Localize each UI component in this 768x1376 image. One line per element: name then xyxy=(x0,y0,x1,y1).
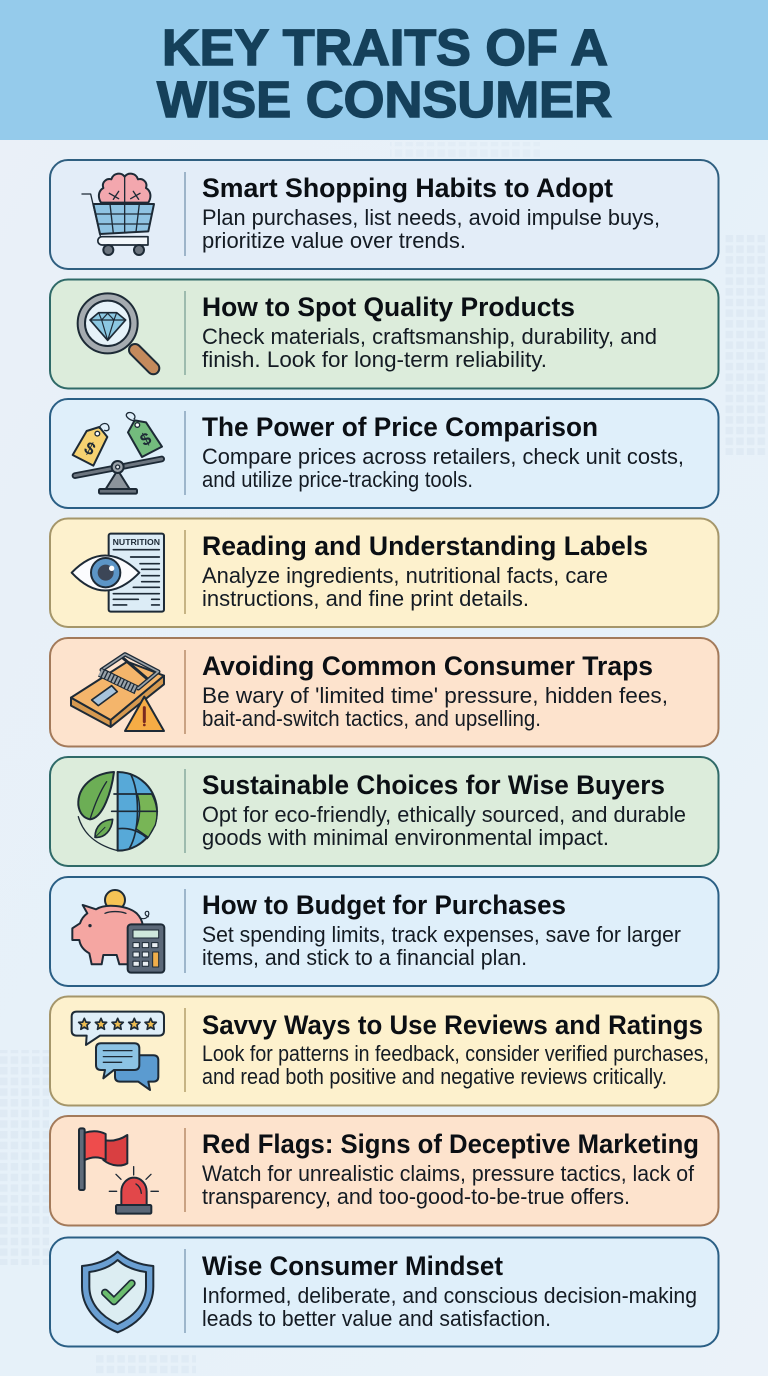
panel: budget for purchases xyxy=(50,877,718,986)
description xyxy=(202,444,684,492)
description xyxy=(202,1161,695,1209)
icon: red flag and siren xyxy=(79,1128,158,1214)
heading: Avoiding Common Consumer Traps xyxy=(202,651,653,681)
description xyxy=(202,324,657,372)
description: Analyze ingredients, nutritional facts, care xyxy=(202,563,608,588)
title: KEY TRAITS OF A xyxy=(162,19,608,76)
icon: star rating and chat bubbles xyxy=(72,1012,164,1090)
icon: price tags on scale xyxy=(73,413,162,494)
description: Informed, deliberate, and conscious decision-making xyxy=(202,1283,697,1308)
description: and read both positive and negative reviews critically. xyxy=(202,1064,667,1089)
description xyxy=(202,683,668,731)
description xyxy=(202,922,681,970)
heading: How to Budget for Purchases xyxy=(202,890,566,920)
panel: smart shopping habits xyxy=(50,160,718,269)
heading: Red Flags: Signs of Deceptive Marketing xyxy=(202,1129,699,1159)
heading: Reading and Understanding Labels xyxy=(202,531,648,561)
description: transparency, and too-good-to-be-true offers. xyxy=(202,1184,630,1209)
icon: price tags on scale: $ xyxy=(137,428,155,450)
icon: piggy bank and calculator xyxy=(72,890,164,973)
icon: globe and leaf xyxy=(78,772,157,851)
title: WISE CONSUMER xyxy=(157,71,612,128)
description: and utilize price-tracking tools. xyxy=(202,467,473,492)
description: Opt for eco-friendly, ethically sourced, and durable xyxy=(202,802,686,827)
description xyxy=(202,563,608,611)
icon: price tags on scale: $ xyxy=(81,437,99,460)
description: Compare prices across retailers, check unit costs, xyxy=(202,444,684,469)
panel: reviews and ratings xyxy=(50,996,718,1106)
description: Set spending limits, track expenses, save for larger xyxy=(202,922,681,947)
description: bait-and-switch tactics, and upselling. xyxy=(202,706,541,731)
panel: sustainable choices xyxy=(50,757,718,866)
panel: spot quality products xyxy=(50,280,718,388)
description: instructions, and fine print details. xyxy=(202,586,529,611)
heading: The Power of Price Comparison xyxy=(202,412,598,442)
description: leads to better value and satisfaction. xyxy=(202,1306,551,1331)
description xyxy=(202,1283,697,1331)
description: Plan purchases, list needs, avoid impulse buys, xyxy=(202,205,660,230)
description xyxy=(202,205,660,253)
heading: Smart Shopping Habits to Adopt xyxy=(202,173,613,203)
heading: How to Spot Quality Products xyxy=(202,292,575,322)
description: Be wary of 'limited time' pressure, hidden fees, xyxy=(202,683,668,708)
panel: reading labels xyxy=(50,518,718,627)
icon: shopping cart with brain xyxy=(82,174,154,255)
icon: magnifier with diamond xyxy=(78,293,153,368)
description xyxy=(202,802,686,850)
icon: mousetrap with warning xyxy=(71,654,164,731)
description: items, and stick to a financial plan. xyxy=(202,945,527,970)
panel: price comparison xyxy=(50,399,718,508)
panel: consumer traps xyxy=(50,638,718,746)
description: Look for patterns in feedback, consider verified purchases, xyxy=(202,1041,709,1066)
icon: eye and nutrition label: NUTRITION xyxy=(113,538,160,547)
title xyxy=(157,19,612,128)
description: finish. Look for long-term reliability. xyxy=(202,347,547,372)
icon: eye and nutrition label xyxy=(72,534,164,612)
heading: Savvy Ways to Use Reviews and Ratings xyxy=(202,1010,703,1040)
heading: Wise Consumer Mindset xyxy=(202,1251,503,1281)
description: Check materials, craftsmanship, durability, and xyxy=(202,324,657,349)
title banner xyxy=(0,0,768,140)
description: prioritize value over trends. xyxy=(202,228,466,253)
description xyxy=(202,1041,709,1089)
heading: Sustainable Choices for Wise Buyers xyxy=(202,770,665,800)
panel: wise consumer mindset xyxy=(50,1238,718,1346)
description: goods with minimal environmental impact. xyxy=(202,825,609,850)
icon: shield with check xyxy=(82,1252,153,1332)
description: Watch for unrealistic claims, pressure tactics, lack of xyxy=(202,1161,695,1186)
panel: red flags xyxy=(50,1116,718,1226)
